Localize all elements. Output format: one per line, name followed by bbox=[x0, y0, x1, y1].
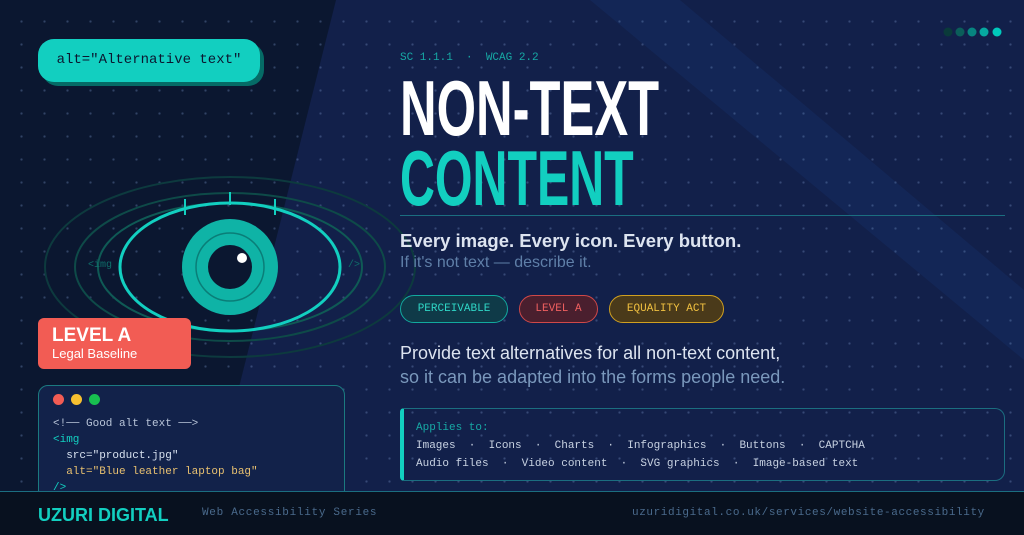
description bbox=[400, 343, 785, 387]
tags: EQUALITY ACT bbox=[627, 303, 706, 315]
dots indicator bbox=[944, 28, 1002, 36]
footer: UZURI DIGITAL bbox=[38, 505, 169, 525]
subtitle: If it's not text — describe it. bbox=[400, 254, 592, 271]
description: Provide text alternatives for all non-text content, bbox=[400, 343, 780, 363]
code window: <img bbox=[53, 434, 79, 446]
badge: level A: Legal Baseline bbox=[52, 346, 137, 361]
tags: LEVEL A bbox=[535, 303, 582, 315]
title: NON-TEXT bbox=[400, 64, 659, 152]
icon: eye: <img bbox=[88, 259, 112, 271]
icon: eye bbox=[44, 176, 416, 358]
alt pill bbox=[38, 39, 264, 86]
alt pill: alt="Alternative text" bbox=[57, 52, 241, 68]
subtitle bbox=[400, 230, 741, 271]
tags: PERCEIVABLE bbox=[418, 303, 490, 315]
meta line: SC 1.1.1 · WCAG 2.2 bbox=[400, 52, 539, 64]
footer: Web Accessibility Series bbox=[202, 507, 377, 519]
code window bbox=[38, 385, 345, 515]
footer: uzuridigital.co.uk/services/website-accessibility bbox=[632, 507, 985, 519]
footer bbox=[0, 491, 1024, 535]
code window: alt="Blue leather laptop bag" bbox=[66, 466, 258, 478]
icon: eye: /> bbox=[348, 259, 360, 271]
code window: src="product.jpg" bbox=[66, 450, 178, 462]
applies-to box: Audio files · Video content · SVG graphics · Image-based text bbox=[416, 458, 858, 470]
applies-to box: Images · Icons · Charts · Infographics · Buttons · CAPTCHA bbox=[416, 440, 865, 452]
code window: /> bbox=[53, 482, 66, 494]
title bbox=[400, 64, 659, 222]
badge: level A: LEVEL A bbox=[52, 325, 131, 346]
badge: level A bbox=[38, 318, 191, 369]
code window: <!── Good alt text ──> bbox=[53, 418, 198, 430]
title: CONTENT bbox=[400, 134, 634, 222]
applies-to box: Applies to: bbox=[416, 422, 489, 434]
description: so it can be adapted into the forms people need. bbox=[400, 367, 785, 387]
tags bbox=[400, 295, 724, 323]
applies-to box bbox=[400, 408, 1005, 481]
subtitle: Every image. Every icon. Every button. bbox=[400, 230, 741, 251]
